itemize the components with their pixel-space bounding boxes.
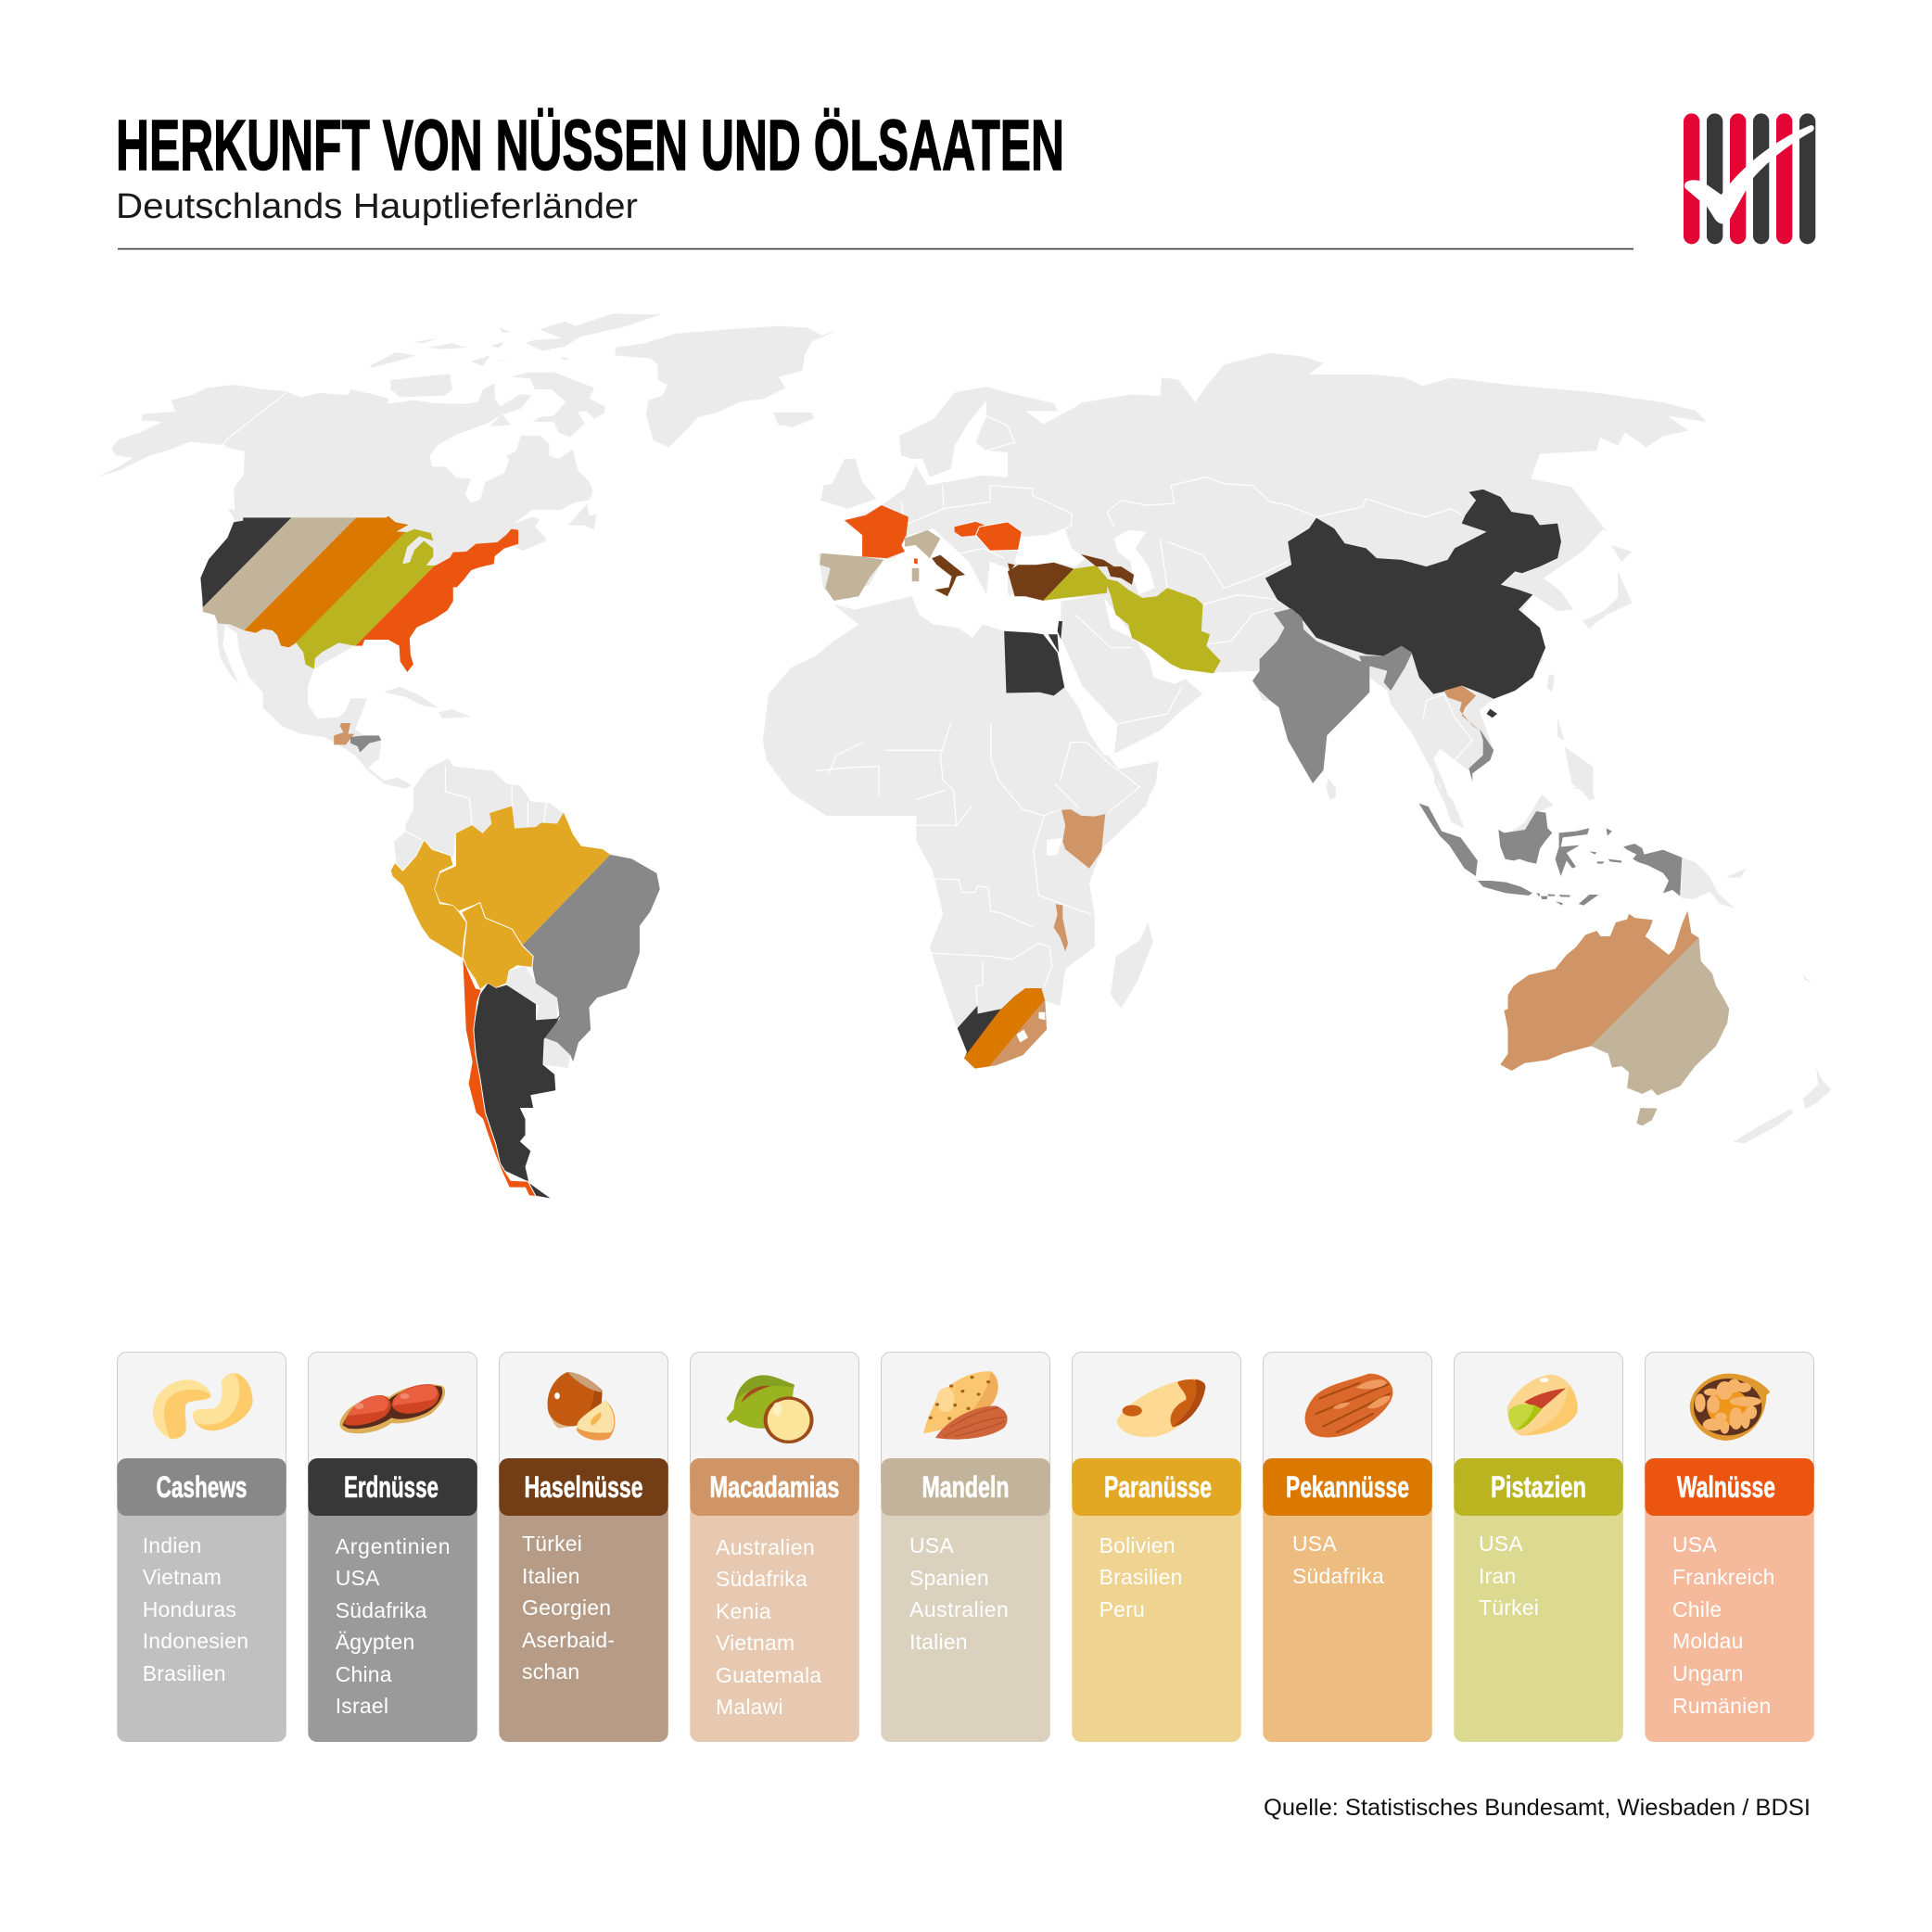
list: Haselnüsse: Türkei [522, 1532, 582, 1556]
header: Haselnüsse: Haselnüsse [525, 1470, 643, 1504]
land: Papua New Guinea [1681, 858, 1735, 909]
list: Pekannüsse: USA [1292, 1532, 1337, 1556]
land: Greenland [616, 326, 837, 447]
icon: peanut [339, 1384, 445, 1433]
land: Scandinavia [899, 387, 990, 477]
icon: pecan [1305, 1374, 1392, 1437]
card: Paranüsse [1072, 1352, 1241, 1742]
icon: cashews [153, 1373, 253, 1440]
list: Paranüsse: Brasilien [1099, 1565, 1183, 1589]
land: Central America [352, 739, 412, 789]
list: Pekannüsse [1263, 1502, 1432, 1742]
land: northern Africa [763, 596, 1157, 816]
country: France [845, 505, 909, 558]
list: Macadamias: Australien [716, 1535, 815, 1559]
list: Haselnüsse: schan [522, 1659, 579, 1684]
list: Erdnüsse: China [336, 1662, 392, 1686]
header: Paranüsse [1072, 1458, 1241, 1516]
header: Erdnüsse: Erdnüsse [344, 1470, 439, 1504]
country: Australia [1500, 910, 1730, 1125]
list: Pistazien: Iran [1479, 1564, 1516, 1588]
list: Macadamias: Kenia [716, 1599, 771, 1623]
icon: almonds [923, 1371, 1008, 1440]
icon: pistachio [1507, 1375, 1578, 1435]
country: Brazil east [523, 855, 660, 1061]
land: Eurasia [819, 353, 1707, 816]
list: Walnüsse: Ungarn [1672, 1661, 1744, 1685]
list: Paranüsse: Peru [1099, 1597, 1145, 1621]
list: Cashews [117, 1502, 286, 1742]
country: Malawi [1054, 904, 1068, 951]
list: Mandeln [881, 1502, 1050, 1742]
header: Mandeln [881, 1458, 1050, 1516]
country: Kenya [1061, 809, 1105, 869]
list: Walnüsse: Chile [1672, 1597, 1722, 1621]
map: North America [97, 313, 837, 760]
card: Walnüsse [1645, 1352, 1814, 1742]
header: Cashews: Cashews [156, 1470, 247, 1504]
icon: brazil nut [1117, 1379, 1205, 1437]
list: Macadamias: Guatemala [716, 1663, 821, 1687]
header: Pekannüsse: Pekannüsse [1286, 1470, 1409, 1504]
list: Pekannüsse: Südafrika [1292, 1564, 1384, 1588]
map: Europe and Asia [773, 353, 1707, 816]
list: Cashews: Honduras [143, 1597, 236, 1621]
country: Brazil west [435, 807, 610, 945]
country: Bolivia [462, 903, 533, 990]
land: Malaysian Borneo [1504, 794, 1554, 833]
list: Haselnüsse: Italien [522, 1564, 580, 1588]
land: Arabian peninsula [1061, 594, 1202, 754]
list: Paranüsse: Bolivien [1099, 1533, 1176, 1557]
list: Walnüsse: Rumänien [1672, 1694, 1771, 1718]
header: Cashews [117, 1458, 286, 1516]
country: Vietnam [1444, 686, 1493, 782]
list: Haselnüsse: Aserbaid- [522, 1628, 615, 1652]
world map [97, 313, 1832, 1199]
source note: Quelle: Statistisches Bundesamt, Wiesbaden / BDSI [1264, 1795, 1811, 1821]
header: Mandeln: Mandeln [922, 1470, 1009, 1504]
list: Erdnüsse: USA [336, 1566, 380, 1590]
country: Romania and Moldova [976, 522, 1022, 551]
country: South Africa striped [957, 988, 1047, 1069]
card: Macadamias [690, 1352, 859, 1742]
header: Haselnüsse [499, 1458, 668, 1516]
header: Erdnüsse [308, 1458, 477, 1516]
country: Honduras [350, 735, 381, 753]
country: Guatemala [334, 723, 354, 744]
country: Egypt and Israel [1004, 621, 1064, 695]
subtitle: Deutschlands Hauptlieferländer [116, 187, 638, 226]
list: Erdnüsse: Israel [336, 1694, 388, 1718]
list: Macadamias: Südafrika [716, 1567, 807, 1591]
map: Southeast Asia and Oceania [1327, 772, 1832, 1143]
land and countries: southern Africa and South America [352, 723, 1159, 1199]
list: Haselnüsse [499, 1502, 668, 1742]
country: Turkey [1008, 563, 1107, 601]
list: Pistazien: USA [1479, 1532, 1523, 1556]
country: USA striped [200, 515, 519, 672]
country: Argentina [474, 984, 561, 1199]
list: Macadamias [690, 1502, 859, 1742]
country: Georgia and Azerbaijan [1081, 554, 1134, 585]
card: Haselnüsse [499, 1352, 668, 1742]
icon: macadamia [726, 1375, 814, 1443]
country: Chile [463, 956, 536, 1196]
list: Mandeln: Spanien [909, 1566, 989, 1590]
country: Indonesia [1419, 804, 1682, 906]
country: Spain [820, 553, 883, 601]
list: Mandeln: Italien [909, 1630, 968, 1654]
icon: hazelnut [548, 1372, 615, 1441]
header: Pistazien: Pistazien [1491, 1470, 1586, 1504]
list: Erdnüsse: Argentinien [336, 1534, 451, 1558]
list: Walnüsse [1645, 1502, 1814, 1742]
country: Iran [1103, 578, 1221, 673]
card: Mandeln [881, 1352, 1050, 1742]
list: Erdnüsse: Südafrika [336, 1598, 427, 1622]
list: Macadamias: Malawi [716, 1695, 783, 1719]
land: New Zealand [1733, 1068, 1832, 1143]
list: Erdnüsse [308, 1502, 477, 1742]
country: Peru [390, 840, 466, 959]
list: Macadamias: Vietnam [716, 1631, 794, 1655]
title: HERKUNFT VON NÜSSEN UND ÖLSAATEN [116, 106, 1064, 185]
country: India [1252, 608, 1412, 783]
header: Walnüsse: Walnüsse [1677, 1470, 1775, 1504]
list: Mandeln: USA [909, 1533, 954, 1557]
icon: walnut [1690, 1374, 1770, 1441]
list: Pistazien [1454, 1502, 1623, 1742]
map: Africa and South America [352, 596, 1159, 1199]
list: Cashews: Vietnam [143, 1565, 222, 1589]
list: Walnüsse: Frankreich [1672, 1565, 1775, 1589]
country: Hungary [955, 522, 985, 537]
header: Pekannüsse [1263, 1458, 1432, 1516]
header: Macadamias: Macadamias [710, 1470, 840, 1504]
list: Cashews: Indien [143, 1533, 202, 1557]
list: Pistazien: Türkei [1479, 1595, 1539, 1620]
logo [1684, 113, 1815, 244]
card: Pekannüsse [1263, 1352, 1432, 1742]
country: Italy [905, 530, 965, 596]
list: Mandeln: Australien [909, 1597, 1009, 1621]
land: northern South America [394, 758, 570, 870]
list: Walnüsse: Moldau [1672, 1629, 1744, 1653]
list: Walnüsse: USA [1672, 1532, 1717, 1557]
list: Cashews: Indonesien [143, 1629, 248, 1653]
card: Pistazien [1454, 1352, 1623, 1742]
list: Haselnüsse: Georgien [522, 1595, 611, 1620]
header: Walnüsse [1645, 1458, 1814, 1516]
land: North America mainland [97, 383, 593, 760]
card: Erdnüsse [308, 1352, 477, 1742]
header: Macadamias [690, 1458, 859, 1516]
header: Paranüsse: Paranüsse [1104, 1470, 1212, 1504]
header: Pistazien [1454, 1458, 1623, 1516]
list: Cashews: Brasilien [143, 1661, 226, 1685]
card: Cashews [117, 1352, 286, 1742]
country: China [1265, 489, 1561, 718]
list: Paranüsse [1072, 1502, 1241, 1742]
list: Erdnüsse: Ägypten [336, 1630, 415, 1654]
